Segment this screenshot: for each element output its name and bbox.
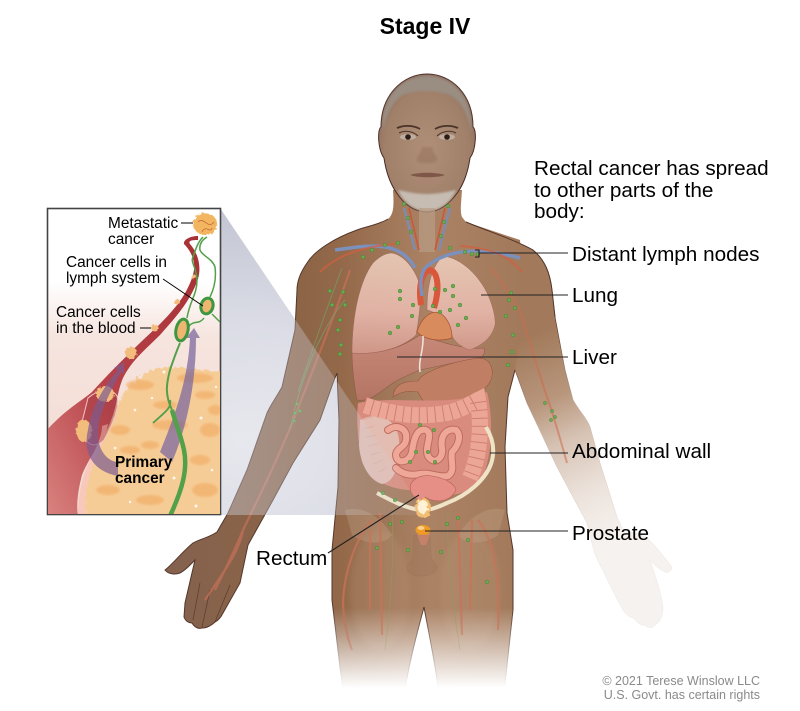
label: distant lymph nodes: Distant lymph nodes	[572, 243, 759, 266]
label: lung: Lung	[572, 284, 618, 307]
prostate	[416, 525, 430, 535]
tumor detail	[198, 220, 214, 232]
tumor specks	[114, 370, 217, 508]
mouth	[410, 173, 445, 177]
pelvic bones	[345, 509, 505, 542]
finger separations	[193, 583, 230, 627]
lymph nodes	[292, 202, 557, 584]
metastatic tumor	[193, 213, 217, 235]
eyes and brows	[397, 126, 458, 140]
description text: body:	[534, 200, 585, 223]
genitals	[407, 535, 437, 576]
thigh highlights	[353, 540, 388, 621]
label: abdominal wall: Abdominal wall	[572, 440, 711, 463]
label: rectum: Rectum	[256, 547, 327, 570]
human figure	[165, 74, 672, 702]
lymph node upper	[199, 297, 215, 315]
prostate highlight	[418, 526, 424, 530]
label: cancer cells in the blood: in the blood	[56, 320, 136, 337]
heart and great vessels	[320, 244, 522, 372]
inset background	[48, 208, 220, 514]
neck structures	[404, 208, 450, 252]
lymph vessel	[153, 237, 220, 516]
ascending colon	[359, 416, 399, 484]
blood vessel	[47, 236, 199, 516]
zoom cone connecting inset to body	[220, 208, 342, 515]
primary cancer mass	[84, 367, 228, 520]
vessel opening	[82, 390, 118, 445]
rectal tumor	[415, 498, 431, 518]
label: primary cancer: Primary	[115, 454, 173, 471]
beard	[398, 190, 456, 211]
urethra	[417, 534, 430, 545]
credit: U.S. Govt. has certain rights	[604, 688, 760, 702]
credit: © 2021 Terese Winslow LLC	[602, 674, 760, 688]
description text: Rectal cancer has spread	[534, 157, 769, 180]
intestine base	[357, 392, 491, 495]
label: prostate: Prostate	[572, 522, 649, 545]
arrow: lymph route	[160, 328, 200, 462]
description text: to other parts of the	[534, 179, 713, 202]
colon loops	[364, 400, 480, 478]
label: primary cancer: cancer	[115, 470, 165, 487]
leader lines inside inset	[140, 223, 203, 328]
hair	[383, 76, 471, 132]
lymph node lower	[174, 318, 190, 342]
lower lip	[412, 177, 443, 184]
cone shading over arm and torso	[220, 208, 427, 515]
abdominal wall	[377, 427, 493, 510]
label: metastatic cancer: cancer	[108, 231, 154, 248]
liver	[352, 335, 485, 400]
leader lines	[328, 250, 568, 553]
panel: inset showing metastasis	[47, 208, 228, 520]
rectum	[410, 476, 456, 501]
vessel inner light	[78, 424, 108, 516]
body outline	[165, 219, 555, 702]
stomach	[393, 358, 492, 407]
body silhouette	[165, 190, 555, 702]
left lung	[352, 253, 421, 353]
small intestine loops	[388, 427, 459, 476]
label: cancer cells in the blood: Cancer cells	[56, 304, 141, 321]
thigh highlight right	[440, 530, 500, 650]
arm and leg vessels	[205, 267, 567, 650]
arrow: blood route	[87, 362, 124, 476]
label: liver: Liver	[572, 346, 617, 369]
right arm fading out	[466, 222, 672, 628]
right lung	[427, 256, 495, 350]
label: cancer cells in lymph system: Cancer cells in	[66, 254, 167, 271]
icon: head and face	[379, 74, 475, 212]
tumor highlight	[418, 500, 428, 514]
title: Stage IV	[380, 13, 471, 39]
nose	[417, 147, 437, 163]
label: cancer cells in lymph system: lymph system	[66, 270, 160, 287]
tumor texture	[96, 373, 222, 505]
label: metastatic cancer: Metastatic	[108, 215, 178, 232]
cancer clusters in vessel	[76, 274, 196, 442]
